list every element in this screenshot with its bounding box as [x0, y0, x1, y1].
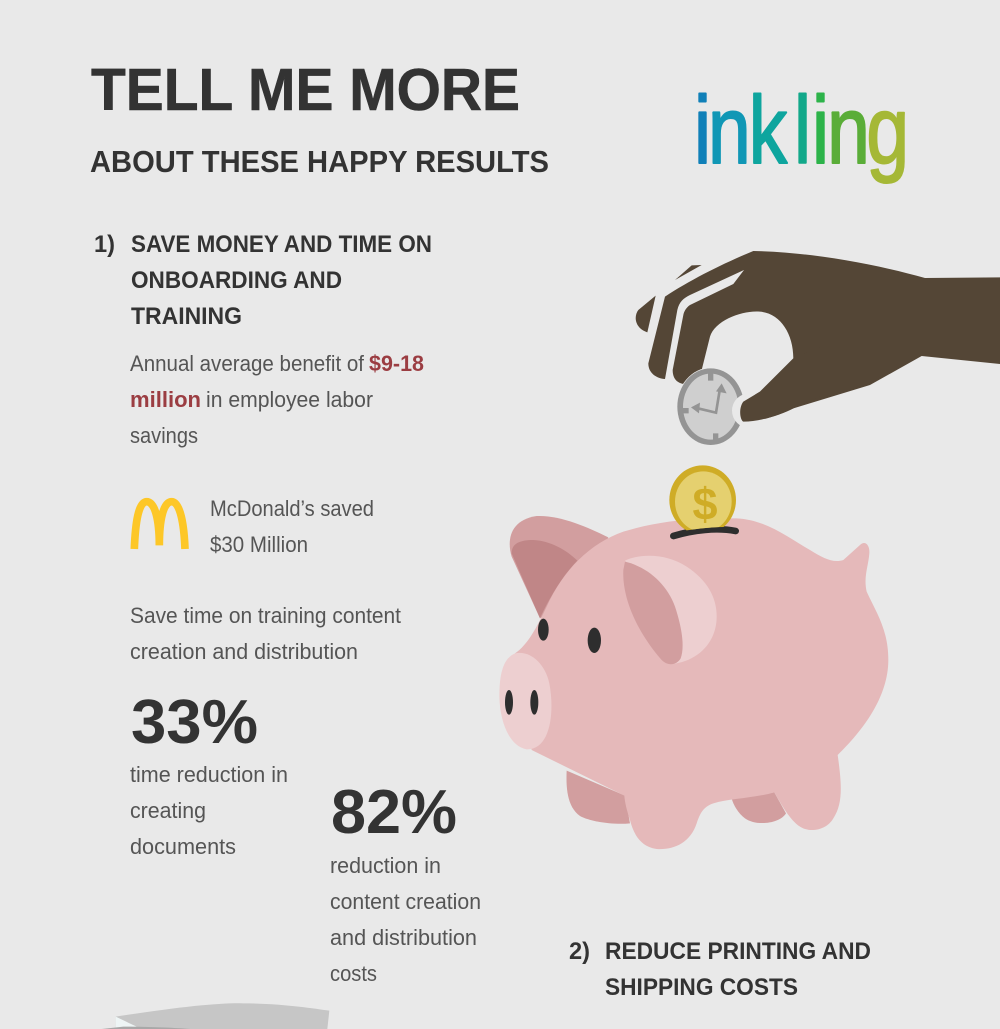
pig left ear: [510, 516, 608, 618]
training content text: creation and distribution: [130, 639, 358, 664]
clock coin: [677, 368, 745, 446]
stat: 33%: documents: [130, 834, 236, 859]
annual benefit text: savings: [130, 423, 198, 448]
annual benefit text: Annual average benefit of: [130, 351, 365, 376]
logo: inkling: k: [749, 77, 788, 184]
pig snout: [499, 653, 551, 749]
pig right ear: [623, 556, 717, 664]
illustration: hand holding clock coin: [636, 251, 1000, 446]
gold dollar coin: $: [692, 478, 718, 529]
thumb tip: [732, 347, 820, 428]
section 1 heading: TRAINING: [131, 303, 242, 330]
McDonald's savings text: $30 Million: [210, 532, 308, 557]
training content text: [130, 603, 401, 664]
stat: 82%: reduction in: [330, 853, 441, 878]
illustration: piggy bank: [499, 465, 888, 849]
stat: 33%: [130, 688, 288, 859]
section 1 heading: ONBOARDING AND: [131, 267, 342, 294]
logo: inkling: g: [866, 77, 909, 184]
hand: [636, 251, 1000, 422]
gold dollar coin: [669, 465, 736, 535]
section 2 heading: SHIPPING COSTS: [605, 974, 798, 1001]
logo: inkling: n: [708, 77, 751, 184]
pig eyes and nostrils: [505, 619, 601, 715]
McDonald's savings text: McDonald’s saved: [210, 496, 374, 521]
annual benefit text: in employee labor: [206, 387, 373, 412]
icon: McDonald's arches: [134, 502, 185, 549]
stat: 82%: costs: [330, 961, 377, 986]
coin slot: [673, 529, 736, 536]
logo: inkling: i: [694, 77, 711, 184]
McDonald's savings text: [210, 496, 374, 557]
stat: 82%: content creation: [330, 889, 481, 914]
logo: inkling: i: [812, 77, 829, 184]
pig back legs: [566, 771, 786, 824]
partial illustration at bottom edge: [102, 1003, 329, 1029]
stat: 33%: 33%: [131, 688, 258, 757]
annual benefit text: [130, 351, 424, 448]
stat: 82%: 82%: [331, 778, 457, 847]
section 2 heading: 2): [569, 938, 590, 965]
stat: 33%: creating: [130, 798, 206, 823]
title: TELL ME MORE: [91, 57, 520, 123]
section 1 number: 1): [94, 231, 115, 258]
training content text: Save time on training content: [130, 603, 401, 628]
section 2 heading: REDUCE PRINTING AND: [605, 938, 871, 965]
pig body: [515, 518, 888, 849]
logo: inkling: l: [794, 77, 811, 184]
section 1 heading: [131, 231, 432, 330]
section 1 heading: SAVE MONEY AND TIME ON: [131, 231, 432, 258]
annual benefit text: million: [130, 387, 201, 412]
section 1: save money and time: [94, 231, 481, 986]
section 2 heading: [569, 938, 871, 1001]
logo: inkling: n: [827, 77, 870, 184]
annual benefit text: $9-18: [369, 351, 424, 376]
stat: 82%: and distribution: [330, 925, 477, 950]
stat: 82%: [330, 778, 481, 986]
stat: 33%: time reduction in: [130, 762, 288, 787]
subtitle: ABOUT THESE HAPPY RESULTS: [90, 144, 549, 179]
